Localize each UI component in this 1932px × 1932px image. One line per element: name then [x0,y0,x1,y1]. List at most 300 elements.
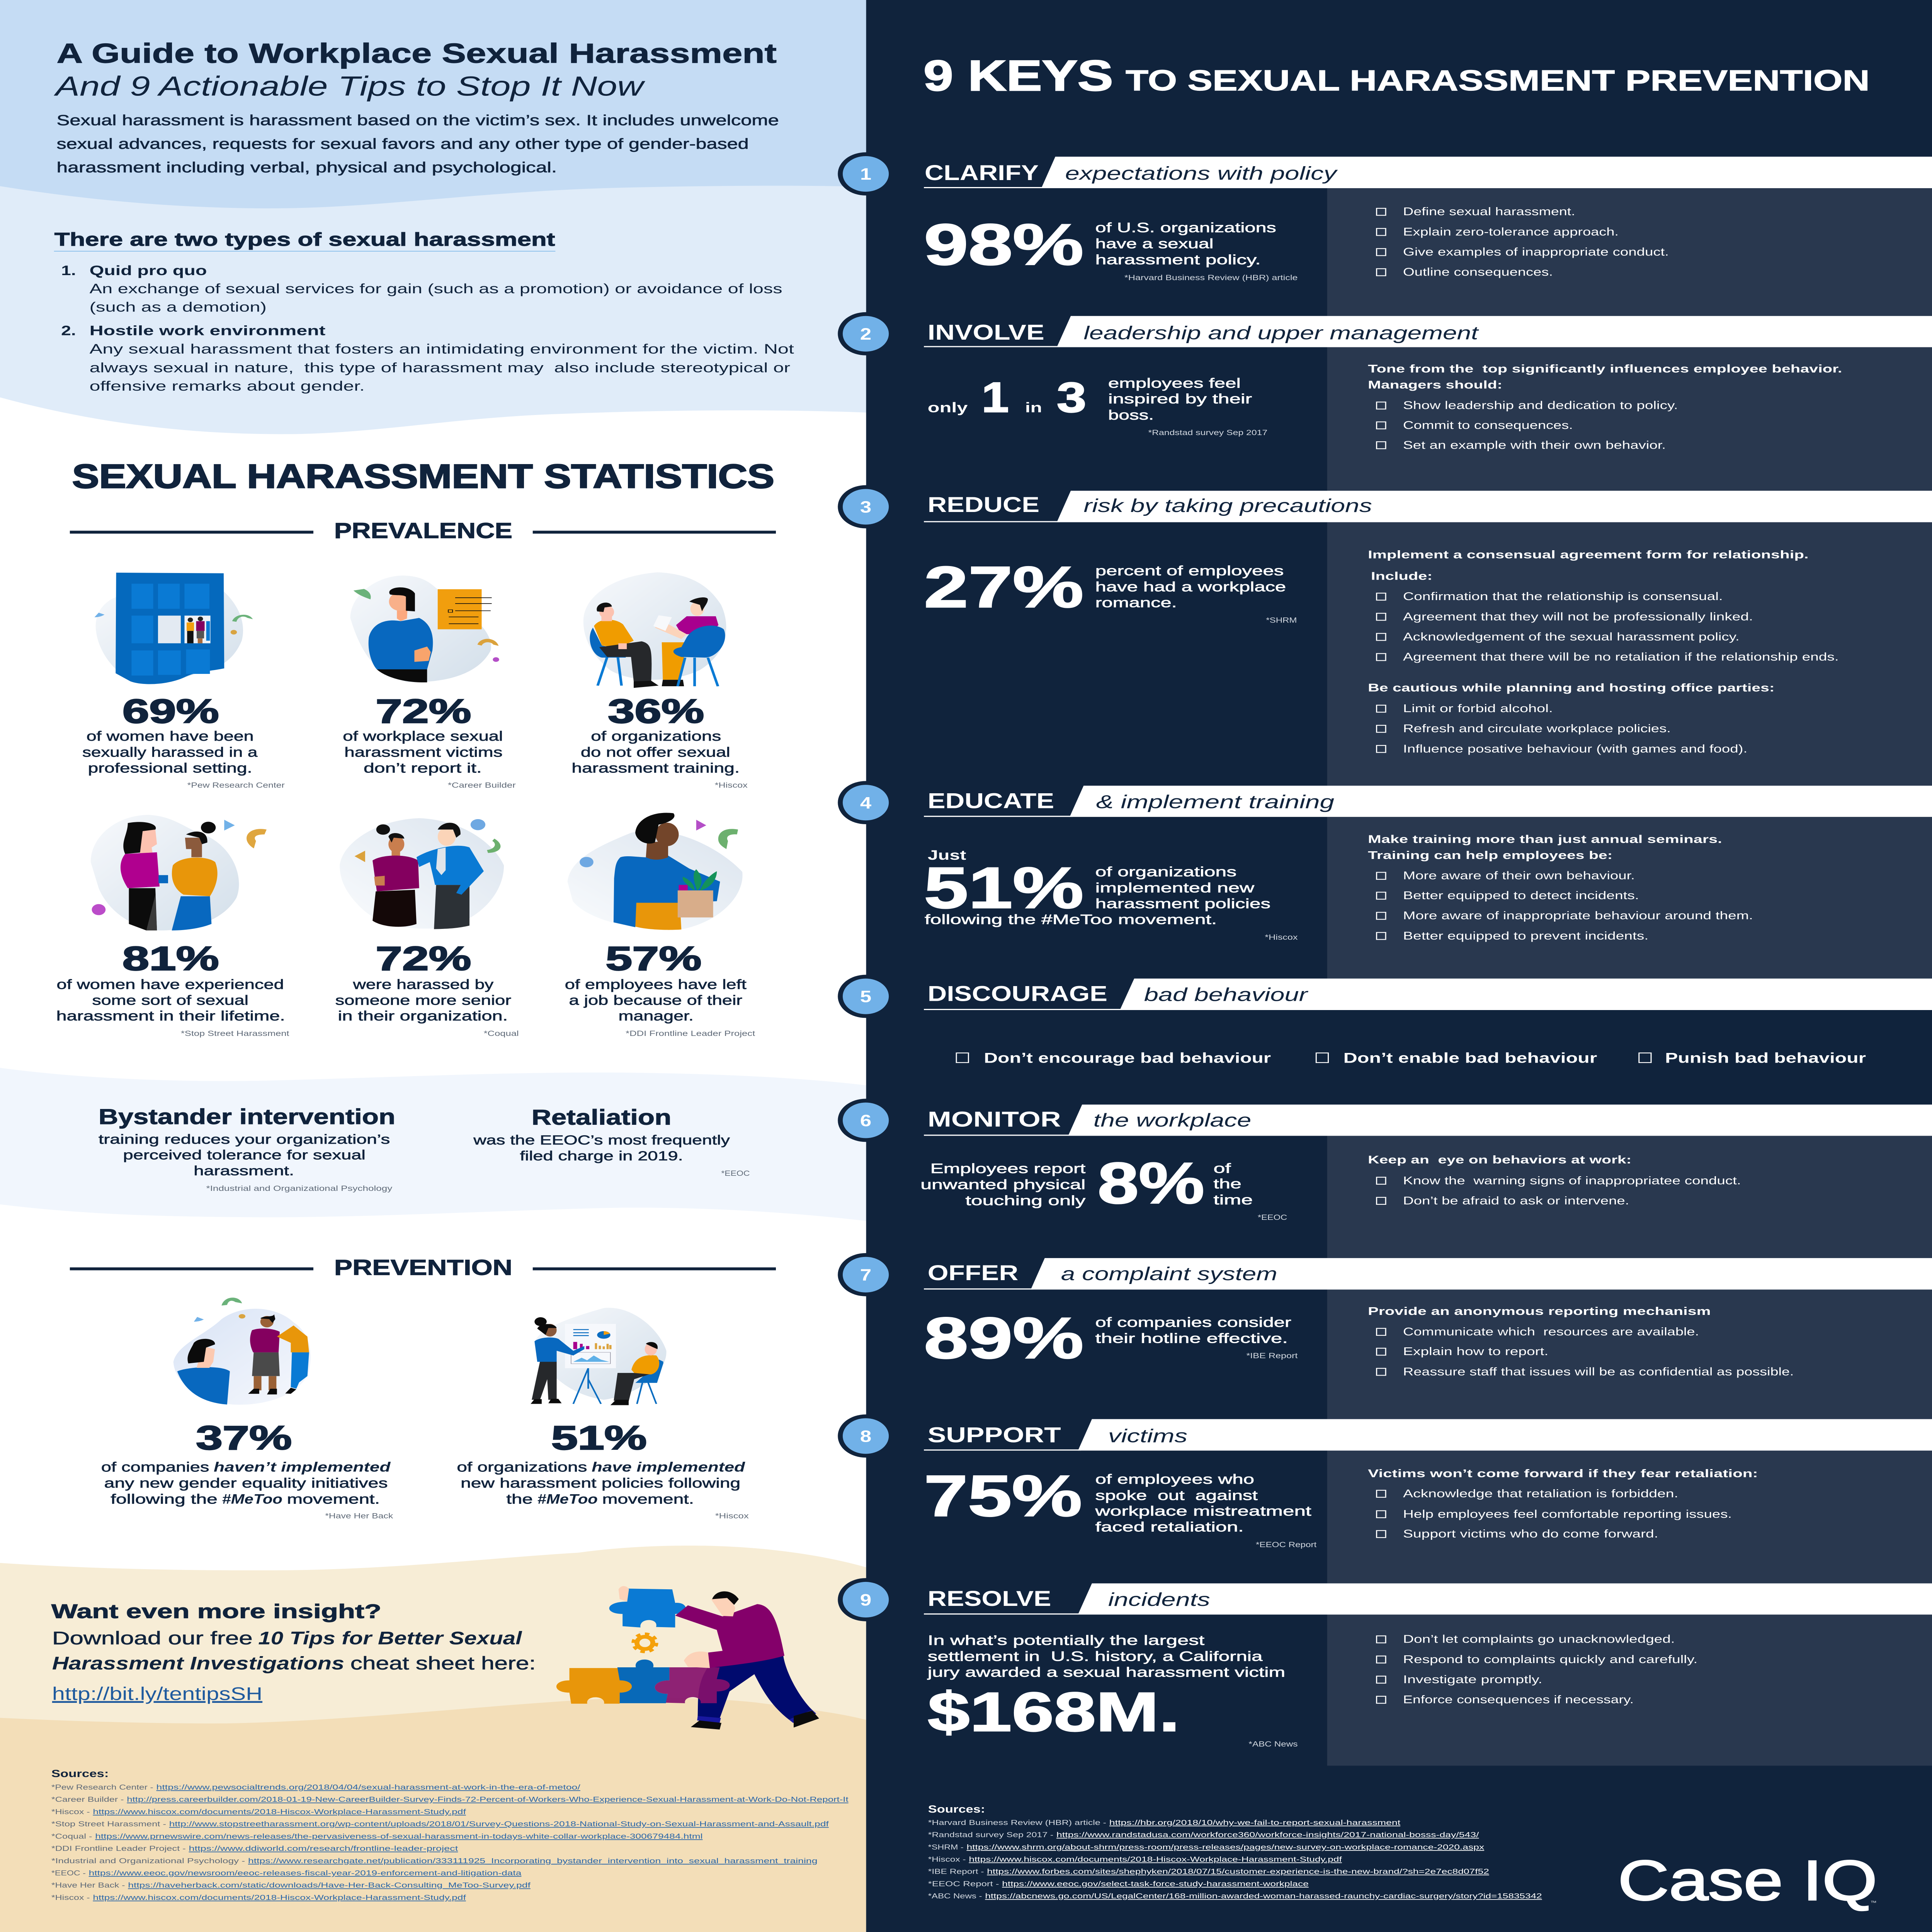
text block: left sources: https://www.eeoc.gov/newsroom/eeoc-releases-fiscal-year-2019-enforcement-and-litigation-data [89,1869,522,1877]
stat: 37%: 37% [196,1419,292,1457]
key 3 header: REDUCE [928,493,1039,517]
text block: left sources: *Have Her Back - [51,1882,125,1889]
checklist 3: Acknowledgement of the sexual harassment policy. [1403,631,1740,643]
key 1 header: expectations with policy [1065,163,1338,184]
stat 51%: 51% [924,855,1083,921]
panel: key 1 clarify [924,156,1932,316]
stat 98%: have a sexual [1095,236,1214,251]
checklist 8: Support victims who do come forward. [1403,1528,1658,1540]
stat 27%: romance. [1095,595,1177,610]
key 4 header: EDUCATE [928,789,1054,813]
stat 89%: their hotline effective. [1095,1331,1288,1346]
stat: 36% [571,692,748,789]
badge 2: 2 [860,325,871,343]
stat: 72% senior [335,940,519,1038]
stat 1 in 3: only [928,400,968,415]
stat $168M: *ABC News [1248,1740,1298,1748]
stat 1 in 3: in [1025,400,1042,415]
stat: 57%: 57% [605,940,702,978]
stat: 37%: movement. [287,1492,380,1507]
intro text: harassment including verbal, physical and psychological. [57,160,557,176]
checklist 2: Set an example with their own behavior. [1403,439,1666,451]
text block: left sources: http://press.careerbuilder.com/2018-01-19-New-CareerBuilder-Survey-Finds-72-Percent-of-Workers-Who-Experience-Sexual-Harassment-at-Work-Do-Not-Report-It [127,1796,849,1804]
callout: retaliation [473,1105,750,1177]
callout: bystander intervention: training reduces your organization’s [99,1132,390,1147]
stat: 51% prevention: *Hiscox [715,1511,749,1520]
key 3 header [924,491,1932,522]
callout: want even more insight [51,1600,536,1704]
stat 98%: of U.S. organizations [1095,220,1276,235]
stat: 81% [56,940,289,1038]
text block: left sources: *Pew Research Center - [51,1784,153,1791]
stat 75%: 75% [924,1464,1082,1529]
stat 89% [924,1306,1298,1371]
callout: bystander intervention: perceived tolerance for sexual [123,1148,366,1162]
stat 8% [920,1151,1287,1221]
callout: want even more insight: cheat sheet here: [350,1653,536,1673]
heading: 9 keys [923,52,1870,100]
key 9 header: RESOLVE [928,1587,1051,1611]
stat: 51% prevention [457,1419,749,1520]
stat 89%: 89% [924,1306,1083,1371]
checklist 3: Confirmation that the relationship is consensual. [1403,590,1723,603]
text block: right sources: https://abcnews.go.com/US/LegalCenter/168-million-awarded-woman-harassed-raunchy-cardiac-surgery/story?id=15835342 [985,1893,1542,1900]
key 2 header: leadership and upper management [1083,322,1479,344]
stat 1 in 3 [928,374,1267,437]
text block: left sources: *EEOC - [51,1869,86,1877]
stat 8%: touching only [966,1193,1085,1208]
stat 51% [924,847,1298,941]
icon: presenter with chart board [531,1308,667,1405]
key 5 header: DISCOURAGE [928,981,1107,1006]
text block: right sources: Sources: [928,1803,985,1815]
checklist 5 [956,1050,1866,1066]
stat 27%: percent of employees [1095,563,1284,578]
checklist 1: Explain zero-tolerance approach. [1403,226,1619,238]
stat $168M: jury awarded a sexual harassment victim [927,1664,1285,1680]
text block: left sources: http://www.stopstreetharassment.org/wp-content/uploads/2018/01/Survey-Questions-2018-National-Study-on-Sexual-Harassment-and-Assault.pdf [169,1820,829,1828]
icon: woman leaving with box [568,813,743,930]
stat: 36%: harassment training. [571,760,740,776]
stat $168M: In what’s potentially the largest [928,1633,1205,1648]
callout: retaliation: Retaliation [532,1105,671,1129]
text block: left sources: https://www.researchgate.net/publication/333111925_Incorporating_bystander_intervention_into_sexual_harassment_training [248,1857,817,1865]
list: harassment types: always sexual in nature, this type of harassment may also include stereotypical or [90,360,790,375]
stat 8%: time [1214,1192,1253,1208]
stat: 72% senior: someone more senior [335,993,511,1008]
stat 27%: have had a workplace [1095,579,1286,594]
text block: left sources: https://haveherback.com/static/downloads/Have-Her-Back-Consulting_MeToo-Survey.pdf [128,1882,531,1889]
stat: 72%: don’t report it. [364,760,482,776]
text block: right sources: https://www.forbes.com/sites/shephyken/2018/07/15/customer-experience-is-the-new-brand/?sh=2e7ec8d07f52 [987,1868,1489,1876]
checklist 8: Help employees feel comfortable reporting issues. [1403,1508,1732,1520]
stat: 36%: 36% [608,692,704,730]
checklist 4: Make training more than just annual seminars. [1368,833,1722,845]
panel: key 3 reduce [924,491,1932,786]
callout: bystander intervention: Bystander intervention [99,1105,395,1129]
text block: right sources: *Hiscox - [928,1855,966,1863]
list: harassment types: Hostile work environment [90,323,326,338]
stat: 57%: of employees have left [565,977,747,992]
stat 75%: faced retaliation. [1095,1519,1244,1534]
list: harassment types: (such as a demotion) [90,299,267,315]
panel: sources band background [0,1697,866,1932]
panel: key 9 resolve [924,1583,1932,1766]
stat 1 in 3: inspired by their [1108,391,1252,406]
key 5 header [924,978,1932,1010]
stat 1 in 3: *Randstad survey Sep 2017 [1148,428,1267,437]
stat: 72% senior: were harassed by [352,977,493,992]
stat: 72% senior: 72% [376,940,471,978]
key 1 header: CLARIFY [925,161,1039,185]
checklist 1: Outline consequences. [1403,266,1553,278]
icon: two women talking [91,815,267,930]
key 4 header: & implement training [1096,791,1334,812]
title [53,38,777,102]
checklist 3: Implement a consensual agreement form for relationship. [1368,549,1808,561]
checklist 5: Don’t encourage bad behaviour [984,1050,1271,1066]
panel: key 2 involve [924,316,1932,491]
checklist 8: Acknowledge that retaliation is forbidden. [1403,1488,1678,1500]
checklist 7: Reassure staff that issues will be as confidential as possible. [1403,1366,1794,1378]
checklist 1: Define sexual harassment. [1403,206,1575,218]
badge 2 [838,312,894,355]
stat: 81%: harassment in their lifetime. [56,1009,285,1024]
text block: left sources: *Stop Street Harassment - [51,1820,166,1828]
callout: retaliation: *EEOC [721,1169,750,1177]
checklist 5: Don’t enable bad behaviour [1344,1050,1597,1066]
text block: left sources: *Career Builder - [51,1796,124,1804]
stat: 37% [101,1419,393,1520]
list: harassment types: Any sexual harassment that fosters an intimidating environment for the victim. Not [90,342,794,357]
stat 1 in 3: 3 [1057,374,1086,421]
key 8 header: SUPPORT [928,1423,1061,1447]
stat: 57% [565,940,755,1038]
stat 1 in 3: 1 [982,374,1009,421]
checklist 9: Investigate promptly. [1403,1673,1543,1686]
panel: key 8 support [924,1419,1932,1583]
stat 51%: following the #MeToo movement. [925,912,1217,927]
title: A Guide to Workplace Sexual Harassment [57,38,777,69]
panel: right dark background [866,0,1932,1932]
stat: 69%: of women have been [87,729,254,744]
stat 75%: *EEOC Report [1256,1540,1317,1549]
checklist 3: Include: [1371,570,1432,582]
stat: 37%: *Have Her Back [325,1511,393,1520]
callout: bystander intervention [99,1105,395,1192]
text block: right sources: *Randstad survey Sep 2017 - [928,1831,1053,1839]
key 9 header [924,1583,1932,1614]
intro text [57,112,779,176]
key 8 header: victims [1108,1425,1187,1446]
checklist 8: Victims won’t come forward if they fear retaliation: [1368,1468,1758,1480]
list: harassment types: 2. [61,323,76,338]
checklist 6 [1368,1154,1741,1207]
stat 89%: *IBE Report [1247,1351,1298,1360]
stat 8%: *EEOC [1258,1213,1287,1221]
badge 4: 4 [860,794,871,812]
panel: key 7 offer [924,1258,1932,1419]
checklist 2: Commit to consequences. [1403,419,1573,432]
checklist 7: Explain how to report. [1403,1345,1548,1358]
icon: two people seated [583,572,726,688]
stat 75%: of employees who [1095,1472,1254,1487]
text block: left sources [51,1768,849,1901]
number badges [838,152,894,1621]
stat 27%: 27% [924,555,1083,620]
stat: 51% prevention: movement. [602,1492,694,1507]
stat: 69%: sexually harassed in a [82,745,258,760]
stat: 57%: a job because of their [569,993,742,1008]
stat: 37%: following the [111,1492,218,1507]
checklist 7 [1368,1305,1794,1378]
icon: man assembling puzzle [556,1586,819,1730]
text block: left sources: *Hiscox - [51,1894,90,1901]
key 5 header: bad behaviour [1144,984,1309,1005]
heading: prevention [70,1255,776,1280]
badge 3 [838,485,894,528]
list: harassment types [61,263,794,394]
stat: 57%: manager. [619,1009,694,1024]
callout: bystander intervention: *Industrial and Organizational Psychology [206,1184,393,1192]
stat 1 in 3: employees feel [1108,376,1241,391]
checklist 3: Agreement that they will not be professionally linked. [1403,611,1753,623]
stat 75% [924,1464,1317,1549]
stat: 69%: *Pew Research Center [187,781,285,789]
stat: 51% prevention: #MeToo [537,1492,598,1507]
stat: 81%: of women have experienced [57,977,284,992]
heading: sexual harassment statistics: SEXUAL HARASSMENT STATISTICS [72,458,774,495]
stat: 72%: harassment victims [344,745,503,760]
heading: two types: There are two types of sexual harassment [54,229,555,250]
checklist 4: Better equipped to detect incidents. [1403,889,1639,902]
key 6 header: the workplace [1094,1109,1251,1131]
checklist 9 [1377,1633,1697,1706]
callout: want even more insight: 10 Tips for Better Sexual [258,1628,522,1648]
heading: prevention: PREVENTION [334,1255,512,1280]
text block: right sources: *ABC News - [928,1893,982,1900]
text block: right sources: *IBE Report - [928,1868,984,1876]
stat 98% [924,212,1298,282]
callout: want even more insight: Want even more insight? [51,1600,381,1622]
checklist 6: Know the warning signs of inappropriatee conduct. [1403,1175,1741,1187]
stat: 37%: any new gender equality initiatives [104,1476,388,1491]
stat 98%: harassment policy. [1095,252,1261,267]
stat: 57%: *DDI Frontline Leader Project [626,1029,755,1038]
stat: 72%: *Career Builder [448,781,516,789]
text block: right sources: https://www.hiscox.com/documents/2018-Hiscox-Workplace-Harassment-Study.pdf [969,1855,1342,1863]
checklist 6: Don’t be afraid to ask or intervene. [1403,1195,1629,1207]
key 4 header [924,786,1932,817]
badge 4 [838,781,894,824]
badge 1 [838,152,894,196]
key 1 header [924,156,1932,188]
callout: want even more insight: http://bit.ly/tentipsSH [52,1684,262,1704]
stat: 51% prevention: new harassment policies following [461,1476,740,1491]
badge 8 [838,1415,894,1458]
checklist 7: Communicate which resources are available. [1403,1326,1699,1338]
text block: left sources: *DDI Frontline Leader Project - [51,1845,186,1852]
heading: prevalence: PREVALENCE [334,518,512,543]
stat: 37%: haven’t implemented [214,1459,391,1475]
stat 27%: *SHRM [1266,616,1297,624]
badge 5 [838,975,894,1018]
stat 51%: implemented new [1095,881,1255,896]
stat: 81%: some sort of sexual [92,993,248,1008]
checklist 4: Better equipped to prevent incidents. [1403,930,1648,942]
text block: right sources [928,1803,1542,1900]
checklist 3: Refresh and circulate workplace policies. [1403,723,1671,735]
text block: right sources: *EEOC Report - [928,1880,999,1888]
checklist 2 [1368,363,1842,451]
text block: left sources: https://www.pewsocialtrends.org/2018/04/04/sexual-harassment-at-work-in-the-era-of-metoo/ [156,1784,580,1791]
stat 98%: *Harvard Business Review (HBR) article [1124,273,1298,282]
stat 1 in 3: boss. [1108,408,1154,423]
stat $168M [927,1633,1298,1748]
key 2 header [924,316,1932,347]
stat: 36%: do not offer sexual [581,745,730,760]
key 2 header: INVOLVE [928,320,1044,344]
badge 5: 5 [860,988,871,1006]
text block: left sources: *Hiscox - [51,1808,90,1816]
checklist 4: Training can help employees be: [1368,849,1612,862]
stat 98%: 98% [924,212,1083,277]
stat: 51% prevention: have implemented [592,1459,746,1475]
badge 6 [838,1099,894,1142]
list: harassment types: An exchange of sexual services for gain (such as a promotion) or avoidance of loss [90,281,782,296]
checklist 8 [1368,1468,1758,1540]
stat $168M: $168M. [928,1681,1180,1743]
text block: left sources: https://www.prnewswire.com/news-releases/the-pervasiveness-of-sexual-harassment-in-todays-white-collar-workplace-300679484.html [95,1833,702,1840]
checklist 9: Enforce consequences if necessary. [1403,1694,1634,1706]
icon: coworkers talking [173,1298,311,1405]
heading: 9 keys: TO SEXUAL HARASSMENT PREVENTION [1126,64,1870,97]
stat: 72% senior: *Coqual [484,1029,519,1038]
panel: left intro and definition bands [0,0,866,434]
stat 51%: harassment policies [1095,896,1270,911]
badge 8: 8 [860,1427,871,1446]
stat 75%: workplace mistreatment [1095,1503,1311,1519]
checklist 2: Tone from the top significantly influences employee behavior. [1368,363,1842,375]
stat: 37%: #MeToo [222,1492,282,1507]
checklist 6: Keep an eye on behaviors at work: [1368,1154,1631,1166]
key 3 header: risk by taking precautions [1083,495,1372,516]
checklist 2: Show leadership and dedication to policy. [1403,400,1678,412]
stat 8%: 8% [1098,1151,1204,1216]
badge 7 [838,1253,894,1296]
callout: want even more insight: Download our free [52,1628,253,1648]
key 7 header: OFFER [928,1261,1018,1285]
checklist 2: Managers should: [1368,379,1502,391]
checklist 9: Don’t let complaints go unacknowledged. [1403,1633,1675,1646]
stat: 69% [82,692,285,789]
icon: man with hand on woman's shoulder [340,818,504,929]
key 7 header: a complaint system [1061,1263,1277,1284]
checklist 3: Influence posative behaviour (with games and food). [1403,743,1747,755]
checklist 5: Punish bad behaviour [1665,1050,1866,1066]
logo: Case IQ: TM [1871,1900,1876,1903]
stat: 37%: of companies [101,1459,209,1475]
checklist 4: More aware of their own behaviour. [1403,870,1635,882]
stat 51%: *Hiscox [1265,933,1298,941]
key 9 header: incidents [1108,1589,1210,1610]
text block: right sources: https://www.eeoc.gov/select-task-force-study-harassment-workplace [1002,1880,1309,1888]
stat: 51% prevention: 51% [551,1419,647,1457]
stat: 72%: 72% [376,692,471,730]
checklist 4 [1368,833,1753,942]
badge 6: 6 [860,1112,871,1130]
text block: left sources: https://www.hiscox.com/documents/2018-Hiscox-Workplace-Harassment-Study.pdf [93,1894,466,1901]
callout: want even more insight: Harassment Investigations [52,1653,344,1673]
list: harassment types: 1. [61,263,76,278]
stat: 81%: 81% [122,940,219,978]
text block: right sources: https://www.randstadusa.com/workforce360/workforce-insights/2017-national-bosss-day/543/ [1056,1831,1479,1839]
list: harassment types: Quid pro quo [90,263,207,278]
stat: 72% [343,692,516,789]
logo: Case IQ: Case IQ [1618,1849,1877,1912]
key 8 header [924,1419,1932,1451]
list: harassment types: offensive remarks about gender. [90,379,365,394]
checklist 9: Respond to complaints quickly and carefully. [1403,1653,1697,1666]
stat 51%: Just [928,847,966,863]
icon: office building [94,573,253,684]
text block: right sources: https://www.shrm.org/about-shrm/press-room/press-releases/pages/new-survey-on-workplace-romance-2020.aspx [966,1844,1485,1851]
panel: key 4 educate [924,786,1932,979]
checklist 3: Limit or forbid alcohol. [1403,702,1553,715]
stat: 72%: of workplace sexual [343,729,503,744]
title: And 9 Actionable Tips to Stop It Now [53,71,645,102]
stat: 36%: of organizations [591,729,721,744]
badge 7: 7 [860,1266,871,1284]
intro text: sexual advances, requests for sexual favors and any other type of gender-based [57,136,749,152]
panel: bystander band background [0,1068,866,1221]
text block: right sources: *Harvard Business Review (HBR) article - [928,1819,1106,1827]
panel: download band background [0,1546,866,1932]
checklist 1 [1377,206,1669,278]
stat: 69%: 69% [122,692,219,730]
key 6 header: MONITOR [928,1107,1061,1131]
stat 27% [924,555,1297,624]
stat: 51% prevention: the [506,1492,533,1507]
stat 75%: spoke out against [1095,1488,1258,1503]
text block: left sources: https://www.ddiworld.com/research/frontline-leader-project [189,1845,458,1852]
icon: person with document [350,576,499,682]
text block: left sources: *Industrial and Organizational Psychology - [51,1857,245,1865]
checklist 4: More aware of inappropriate behaviour around them. [1403,910,1753,922]
callout: retaliation: filed charge in 2019. [520,1149,683,1163]
heading: 9 keys: 9 KEYS [923,52,1113,100]
stat 8%: unwanted physical [920,1177,1085,1192]
stat: 36%: *Hiscox [715,781,748,789]
stat $168M: settlement in U.S. history, a California [928,1649,1263,1664]
panel: key 6 monitor [920,1105,1932,1258]
panel: key 5 discourage [924,978,1932,1066]
callout: bystander intervention: harassment. [194,1163,294,1178]
badge 9 [838,1578,894,1621]
badge 3: 3 [860,498,871,516]
checklist 3: Be cautious while planning and hosting office parties: [1368,682,1775,694]
stat: 69%: professional setting. [88,760,252,776]
text block: left sources: *Coqual - [51,1833,92,1840]
stat 89%: of companies consider [1095,1315,1291,1330]
stat 51%: of organizations [1095,864,1236,879]
checklist 3 [1368,549,1839,755]
stat: 51% prevention: of organizations [457,1459,587,1475]
callout: retaliation: was the EEOC’s most frequently [473,1133,730,1148]
checklist 7: Provide an anonymous reporting mechanism [1368,1305,1711,1318]
text block: right sources: *SHRM - [928,1844,964,1851]
intro text: Sexual harassment is harassment based on the victim’s sex. It includes unwelcome [57,112,779,129]
